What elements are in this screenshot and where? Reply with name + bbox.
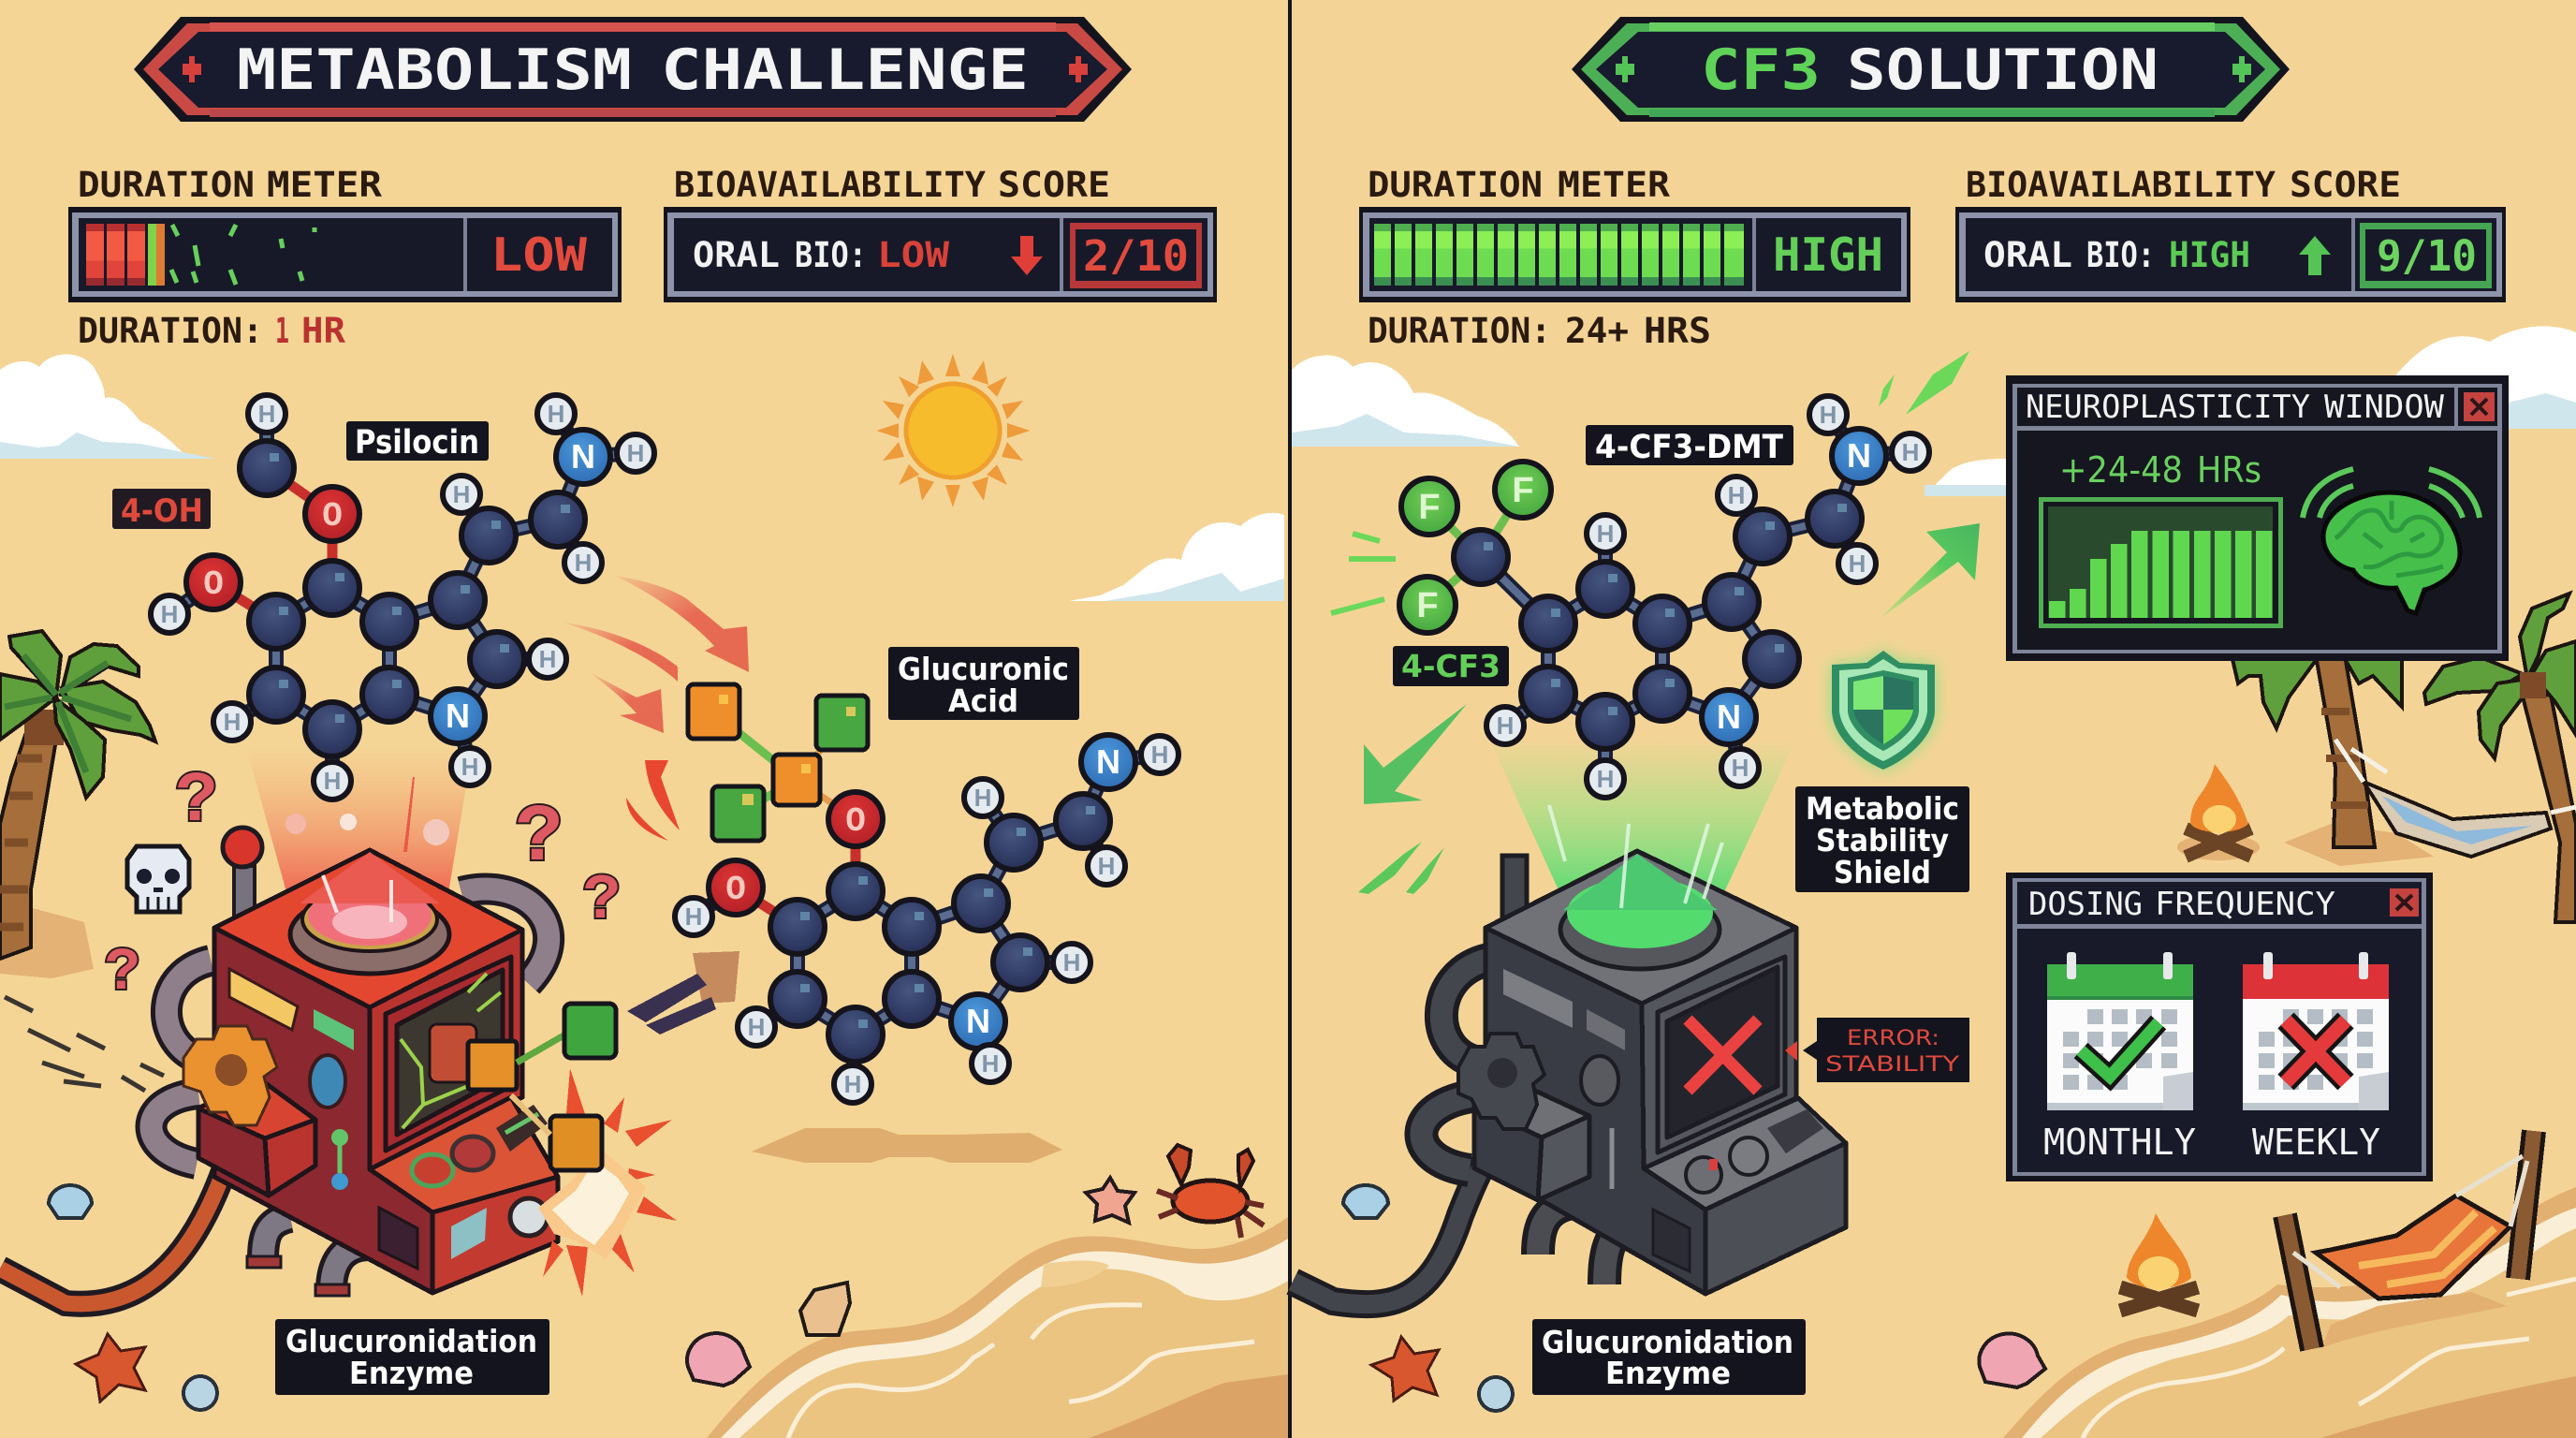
icon: crab (1157, 1145, 1264, 1238)
cloud right (1069, 513, 1284, 601)
icon: up arrow (2299, 236, 2331, 275)
label: metabolic stability shield: Stability (1816, 822, 1949, 858)
4-CF3-DMT molecule: H (1732, 754, 1749, 782)
bioavailability score high: BIO: (2086, 235, 2155, 275)
psilocin molecule: H (161, 600, 178, 628)
machine body (198, 850, 558, 1293)
4-CF3-DMT molecule: F (1416, 586, 1439, 625)
glucuronide conjugate molecule: N (1096, 742, 1120, 781)
icon: red X on screen (1688, 1020, 1758, 1091)
glucuronidation enzyme machine, damaged (0, 828, 558, 1304)
label: 4-CF3-DMT: 4-CF3-DMT (1595, 429, 1783, 466)
duration value: 24+ hrs: 24+ (1565, 311, 1629, 351)
beam red (246, 747, 473, 899)
heading: duration meter (1368, 165, 1671, 205)
red energy sparks above enzyme (285, 777, 449, 852)
icon: sun (876, 354, 1030, 507)
glucuronide conjugate molecule: O (845, 802, 866, 841)
icon: glowing brain (2303, 469, 2480, 613)
title banner: CF3 solution (1572, 17, 2290, 122)
title banner: metabolism challenge: METABOLISM (237, 37, 632, 103)
glucuronide conjugate molecule: H (982, 1049, 999, 1078)
divider between panels (1288, 0, 1292, 1438)
psilocin molecule (151, 395, 654, 800)
scenery: right shoreline (2003, 1187, 2576, 1438)
psilocin molecule: H (548, 400, 564, 428)
psilocin molecule: N (446, 697, 470, 735)
hammock between palms: blue (2335, 740, 2576, 857)
title banner: CF3 solution: SOLUTION (1847, 37, 2159, 103)
heading: bioavailability score: BIOAVAILABILITY (674, 165, 987, 205)
bioavailability score high: ORAL (1983, 235, 2072, 275)
dosing title: FREQUENCY (2155, 886, 2335, 923)
control panel details (1503, 969, 1573, 1028)
glucuronide conjugate molecule: H (748, 1013, 765, 1041)
explosion (538, 1068, 677, 1297)
bioavailability score high: 9/10 (2377, 231, 2477, 281)
4-CF3-DMT molecule: F (1512, 471, 1534, 510)
curved red metabolism arrows (564, 576, 749, 841)
calendar label: weekly: WEEKLY (2252, 1122, 2380, 1163)
icon: calendar cross weekly (2243, 952, 2389, 1110)
title banner: metabolism challenge (134, 17, 1132, 122)
callout: error stability (1785, 1018, 1969, 1082)
bioavailability score high: HIGH (2169, 235, 2250, 275)
label: psilocin: Psilocin (355, 424, 479, 462)
dome (1560, 890, 1720, 969)
beach details: shells and starfish (1343, 1185, 2045, 1411)
cloud upper left (0, 354, 215, 459)
glucuronide conjugate molecule: H (974, 784, 991, 812)
duration value: 1 hr: HR (301, 311, 346, 351)
duration meter high (1359, 207, 1910, 302)
icons: question marks: ? (105, 940, 140, 1007)
heading: bioavailability score: SCORE (998, 165, 1110, 205)
stable grey enzyme machine (1293, 805, 1846, 1304)
label: 4-OH: 4-OH (121, 492, 203, 530)
4-CF3-DMT molecule: N (1717, 697, 1741, 736)
window value: +24-48 hrs (2059, 449, 2261, 491)
cloud upper left right-panel (1292, 355, 1519, 447)
window close button (2464, 392, 2495, 421)
panel: CF3 solution (1292, 17, 2576, 1411)
psilocin molecule: H (575, 549, 592, 577)
psilocin molecule: O (203, 565, 224, 604)
glucuronide conjugate molecule: H (685, 902, 702, 931)
duration value: 24+ hrs (1368, 311, 1711, 351)
4-CF3-DMT molecule: H (1497, 712, 1514, 740)
4-CF3-DMT molecule: H (1728, 481, 1745, 509)
neuroplasticity title (2026, 389, 2445, 426)
panel: metabolism challenge (0, 17, 1284, 1410)
palm tree right (2424, 594, 2576, 922)
callout: error stability: ERROR: (1847, 1027, 1939, 1050)
heading: duration meter: METER (1558, 165, 1671, 205)
4-CF3-DMT molecule: H (1902, 438, 1919, 466)
4-CF3-DMT molecule: H (1820, 401, 1837, 429)
glucuronide conjugate molecule: H (1151, 741, 1168, 769)
hose and pipes (1293, 1145, 1501, 1304)
cracked screen lines (401, 974, 501, 1128)
duration meter low: LOW (490, 228, 588, 282)
debris trail (627, 951, 739, 1034)
window: neuroplasticity (2006, 375, 2509, 661)
psilocin molecule: H (627, 439, 644, 467)
machine body (1474, 851, 1846, 1294)
psilocin molecule: H (324, 767, 341, 795)
icons: question marks: ? (175, 761, 218, 842)
heading: duration meter (78, 165, 383, 205)
glucuronide conjugate molecule: N (966, 1002, 990, 1040)
icon: campfire lower (2120, 1213, 2198, 1311)
label: glucuronidation enzyme right: Glucuronidation (1542, 1324, 1793, 1360)
icon: down arrow (1011, 236, 1043, 275)
label: glucuronidation enzyme left: Glucuronidation (285, 1323, 537, 1359)
label: glucuronic acid (888, 647, 1079, 720)
title banner: metabolism challenge: CHALLENGE (661, 37, 1029, 103)
4-CF3-DMT molecule: H (1597, 520, 1614, 548)
neuroplasticity title: WINDOW (2324, 389, 2445, 426)
4-CF3-DMT molecule (1399, 396, 1929, 798)
glucuronic acid cubes (688, 684, 868, 841)
window value: +24-48 hrs: HRs (2197, 449, 2261, 491)
hose and pipes (0, 1161, 227, 1304)
4-CF3-DMT molecule: H (1597, 765, 1614, 793)
dosing title: DOSING (2028, 886, 2143, 923)
glucuronic cubes being attached (430, 1004, 616, 1170)
duration value: 1 hr: 1 (275, 311, 289, 351)
bioavailability score low: ORAL (693, 235, 780, 275)
label: glucuronic acid: Acid (948, 682, 1018, 719)
window close button (2390, 888, 2419, 917)
molecule ground shadow (752, 1128, 1062, 1163)
label: glucuronidation enzyme right: Enzyme (1605, 1355, 1731, 1391)
dosing title (2028, 886, 2335, 923)
psilocin molecule: H (224, 708, 241, 736)
bioavailability score low: BIO: (795, 235, 867, 275)
glucuronide conjugate molecule: H (1098, 852, 1115, 880)
psilocin molecule: H (539, 645, 556, 673)
psilocin molecule: H (258, 400, 275, 428)
icons: question marks: ? (515, 792, 564, 884)
green beam (1489, 739, 1794, 894)
bioavailability score low (664, 207, 1217, 302)
bioavailability score high (1955, 207, 2506, 302)
glucuronide conjugate molecule: O (725, 871, 746, 909)
icons: question marks (105, 761, 621, 1007)
clouds behind neuroplasticity window (1925, 326, 2576, 496)
palm tree behind windows 1 (2232, 655, 2434, 866)
icon: gear (183, 1026, 277, 1125)
psilocin molecule: O (322, 497, 343, 536)
hammock on posts: orange (2285, 1131, 2534, 1349)
neuroplasticity title: NEUROPLASTICITY (2026, 389, 2310, 426)
calendar label: monthly: MONTHLY (2043, 1122, 2196, 1163)
window: dosing frequency (2006, 873, 2433, 1181)
duration value: 24+ hrs: HRS (1644, 311, 1711, 351)
sand background left panel (0, 0, 1288, 1438)
label: metabolic stability shield: Metabolic (1806, 790, 1959, 827)
4-CF3-DMT molecule: N (1847, 436, 1871, 475)
label: 4-CF3: 4-CF3 (1401, 648, 1500, 684)
speed lines (5, 997, 164, 1091)
4-CF3-DMT molecule: F (1418, 488, 1441, 527)
icon: campfire upper (2177, 764, 2260, 860)
duration value: 1 hr (78, 311, 346, 351)
heading: duration meter: DURATION (78, 165, 255, 205)
glucuronide conjugate molecule: H (844, 1070, 861, 1098)
callout: error stability: STABILITY (1825, 1053, 1960, 1077)
label: glucuronidation enzyme left: Enzyme (349, 1355, 474, 1391)
scenery: left shoreline (707, 1217, 1288, 1438)
label: glucuronidation enzyme right (1532, 1319, 1806, 1395)
label: glucuronidation enzyme left (275, 1319, 549, 1395)
beach details: shells and starfish (49, 1178, 1134, 1410)
icon: skull (127, 846, 189, 912)
glucuronide conjugate molecule: H (1063, 948, 1080, 976)
title banner: CF3 solution: CF3 (1701, 37, 1821, 103)
bioavailability score low: 2/10 (1083, 231, 1189, 281)
icon: metabolic stability shield (1832, 651, 1935, 770)
bioavailability score low: LOW (877, 235, 950, 275)
window value: +24-48 hrs: +24-48 (2059, 449, 2183, 491)
sand background right panel (1292, 0, 2576, 1438)
label: glucuronic acid: Glucuronic (898, 651, 1069, 687)
label: metabolic stability shield (1795, 786, 1969, 892)
icon: grey gear (1458, 1034, 1544, 1129)
icon: calendar check monthly (2047, 952, 2193, 1110)
psilocin molecule: H (453, 480, 470, 508)
duration meter low (68, 207, 622, 302)
green deflection arrows (1331, 351, 1980, 894)
duration meter high: HIGH (1773, 228, 1883, 282)
icons: question marks: ? (583, 865, 621, 937)
bar chart: neuroplasticity window (2039, 497, 2283, 628)
psilocin molecule: H (461, 753, 478, 781)
control panel details (229, 969, 298, 1030)
duration value: 1 hr: DURATION: (78, 311, 263, 351)
psilocin molecule: N (571, 437, 595, 476)
palm tree left (0, 631, 155, 978)
label: metabolic stability shield: Shield (1834, 854, 1931, 890)
heading: duration meter: METER (267, 165, 383, 205)
heading: bioavailability score: SCORE (2290, 165, 2401, 205)
4-CF3-DMT molecule: H (1849, 550, 1866, 578)
heading: duration meter: DURATION (1368, 165, 1543, 205)
heading: bioavailability score: BIOAVAILABILITY (1966, 165, 2276, 205)
dome (290, 895, 449, 974)
duration value: 24+ hrs: DURATION: (1368, 311, 1551, 351)
glucuronide conjugate molecule (675, 684, 1178, 1103)
